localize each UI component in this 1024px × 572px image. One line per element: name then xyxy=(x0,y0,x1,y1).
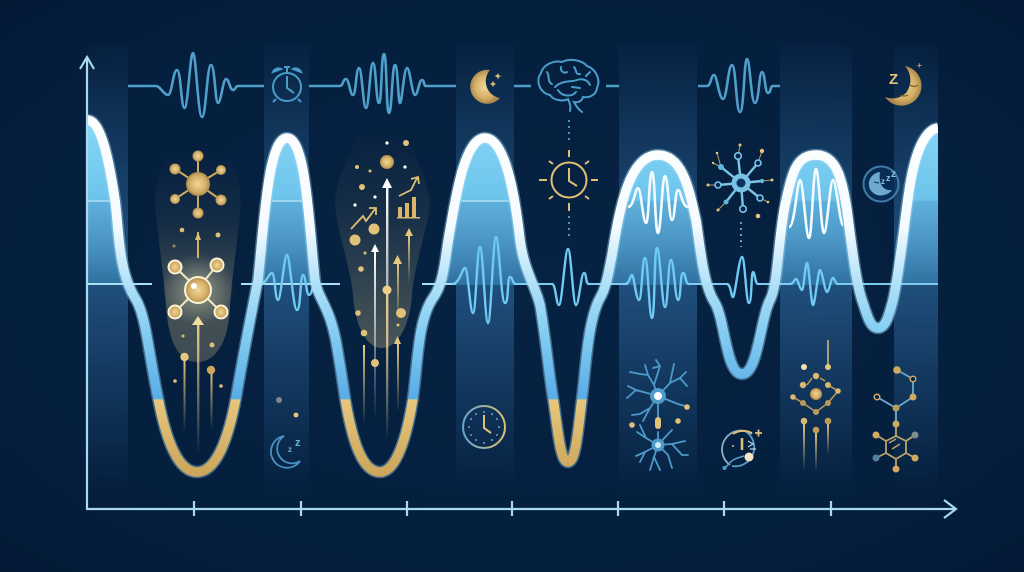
level lines xyxy=(87,201,938,284)
icon: moon face with Z: Z xyxy=(889,71,898,88)
icon: gold molecule top xyxy=(170,150,226,218)
icon: brain xyxy=(538,60,598,112)
icon: gold crescent moon xyxy=(470,70,502,104)
top EEG trace xyxy=(128,53,780,117)
icon: moon face with Z xyxy=(885,61,922,106)
mid EEG bursts xyxy=(260,237,838,323)
vertical time bands xyxy=(87,45,938,490)
icon: gold ring molecule xyxy=(790,340,841,472)
gold glow funnels xyxy=(155,118,430,362)
icon: crescent with z's, blue: z xyxy=(288,445,292,454)
rising arrows and particles: left xyxy=(172,228,223,455)
icon: glowing molecule xyxy=(168,258,228,318)
icon: alarm clock xyxy=(273,67,301,102)
icon: crescent with z's, blue: z xyxy=(295,437,301,449)
icon: sleep badge xyxy=(864,166,898,202)
area under the wave peaks xyxy=(88,125,938,285)
icon: sleep badge: z xyxy=(891,169,896,180)
icon: neurons and synapse xyxy=(627,360,690,470)
icon: moon face with Z: + xyxy=(917,61,922,70)
icon: sun clock xyxy=(539,150,598,211)
icon: wall clock xyxy=(463,406,505,448)
icon: time and metabolism badge xyxy=(722,430,762,470)
axes xyxy=(80,57,956,518)
icon: branching neuron star xyxy=(706,144,774,218)
dotted connector: brain to clock xyxy=(568,120,570,143)
icon: crescent with z's, blue xyxy=(271,397,301,468)
icon: sleep badge: z xyxy=(881,177,885,186)
rising arrows, trend and bar chart: centre left xyxy=(350,140,420,440)
dotted connector below neuron star xyxy=(740,222,742,247)
infographic canvas xyxy=(79,52,958,519)
main wave curve xyxy=(87,120,938,472)
white bursts inside peaks xyxy=(628,169,843,238)
icon: hexagonal chemical structure xyxy=(872,366,918,472)
dotted connector below clock xyxy=(568,216,570,240)
icon: sleep badge: z xyxy=(886,173,891,183)
